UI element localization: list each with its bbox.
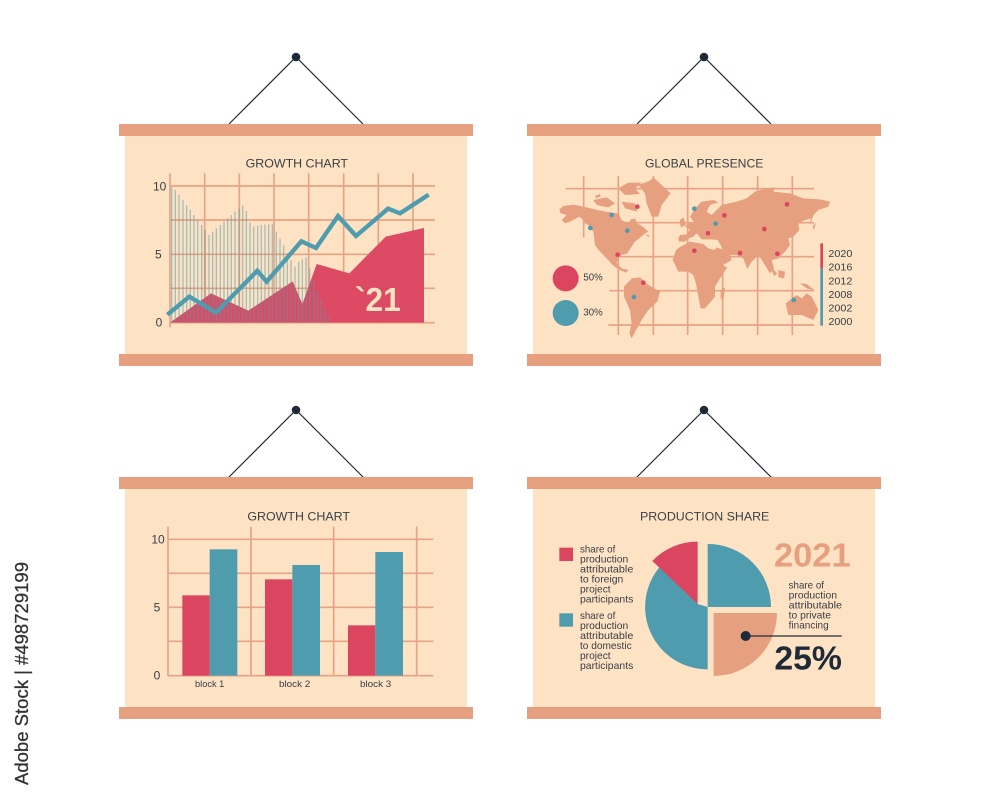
legend: 50 percent: 50% [583, 273, 603, 284]
panel title: PRODUCTION SHARE [640, 510, 769, 524]
year label: `21 [355, 282, 401, 319]
legend: foreign participants: attributable [580, 564, 633, 575]
private financing note: attributable [789, 600, 842, 611]
year timeline [820, 243, 852, 328]
panel: growth bar chart [119, 406, 473, 719]
y axis labels: 5 [154, 601, 161, 615]
year timeline: 2020 [828, 249, 852, 260]
bottom rod [119, 354, 473, 366]
legend: foreign participants [559, 544, 634, 605]
year timeline: 2002 [828, 304, 852, 315]
legend: domestic participants [559, 611, 634, 672]
location dots: teal [588, 206, 796, 302]
legend: 30 percent [553, 300, 603, 326]
y axis labels: 0 [156, 315, 163, 329]
private financing note: financing [789, 620, 829, 631]
poster sheet [533, 489, 875, 707]
legend: foreign participants: participants [580, 594, 634, 605]
poster sheet [125, 136, 467, 354]
legend: domestic participants: share of [580, 611, 616, 622]
continents: old world [673, 187, 830, 320]
hanger: string and pin [229, 53, 363, 124]
world map [553, 156, 852, 338]
block 3 bars [348, 552, 403, 676]
y axis labels [153, 179, 167, 329]
year timeline: 2000 [828, 317, 852, 328]
year timeline: 2012 [828, 276, 852, 287]
chart title: GROWTH CHART [247, 510, 351, 524]
block 2 bars [265, 565, 320, 676]
x axis labels [195, 679, 391, 689]
teal trend line [167, 195, 429, 315]
location dots: red [615, 202, 789, 285]
legend: foreign participants: project [580, 584, 611, 595]
poster sheet [125, 489, 467, 707]
legend: domestic participants: to domestic [580, 641, 632, 652]
x axis labels: block 1 [195, 679, 224, 689]
bottom rod [527, 707, 881, 719]
legend: domestic participants: attributable [580, 631, 633, 642]
thin bar series [172, 187, 328, 323]
hanger: string and pin [637, 406, 771, 477]
top rod [119, 124, 473, 136]
pie chart [645, 542, 777, 676]
panel: global presence map [527, 53, 881, 366]
top rod [527, 477, 881, 489]
year timeline: 2016 [828, 263, 852, 274]
panel: production share [527, 406, 881, 719]
legend: foreign participants: share of [580, 544, 616, 555]
year timeline: 2008 [828, 290, 852, 301]
y axis labels: 10 [151, 532, 165, 546]
poster sheet [533, 136, 875, 354]
percentage callout: 25% [774, 640, 842, 677]
private financing note: to private [789, 610, 831, 621]
legend: foreign participants: to foreign [580, 574, 623, 585]
legend: domestic participants: participants [580, 661, 634, 672]
panel: growth line chart [119, 53, 473, 366]
private financing note: production [789, 590, 837, 601]
red area series [170, 228, 424, 323]
stock id caption: Adobe Stock | #498729199 [12, 562, 32, 785]
bottom rod [527, 354, 881, 366]
top rod [527, 124, 881, 136]
legend: 30 percent: 30% [583, 308, 603, 319]
hanger: string and pin [229, 406, 363, 477]
legend: domestic participants: production [580, 621, 628, 632]
private financing note: share of [789, 580, 824, 591]
year heading: 2021 [774, 538, 851, 575]
production content [559, 510, 851, 677]
map title: GLOBAL PRESENCE [645, 156, 763, 170]
callout pointer [741, 631, 842, 641]
continents: americas [559, 177, 671, 338]
hanger: string and pin [637, 53, 771, 124]
x axis labels: block 2 [279, 679, 310, 689]
bottom rod [119, 707, 473, 719]
private financing note [789, 580, 842, 631]
legend: 50 percent [553, 265, 603, 291]
y axis labels: 10 [153, 179, 167, 193]
y axis labels: 0 [154, 669, 161, 683]
block 1 bars [182, 549, 237, 676]
y axis labels [151, 532, 165, 683]
legend: foreign participants: production [580, 554, 628, 565]
bar chart [151, 510, 433, 689]
y axis labels: 5 [155, 248, 162, 262]
top rod [119, 477, 473, 489]
legend: domestic participants: project [580, 651, 611, 662]
x axis labels: block 3 [360, 679, 391, 689]
chart: growth area and line [153, 156, 435, 329]
chart title: GROWTH CHART [246, 156, 349, 170]
